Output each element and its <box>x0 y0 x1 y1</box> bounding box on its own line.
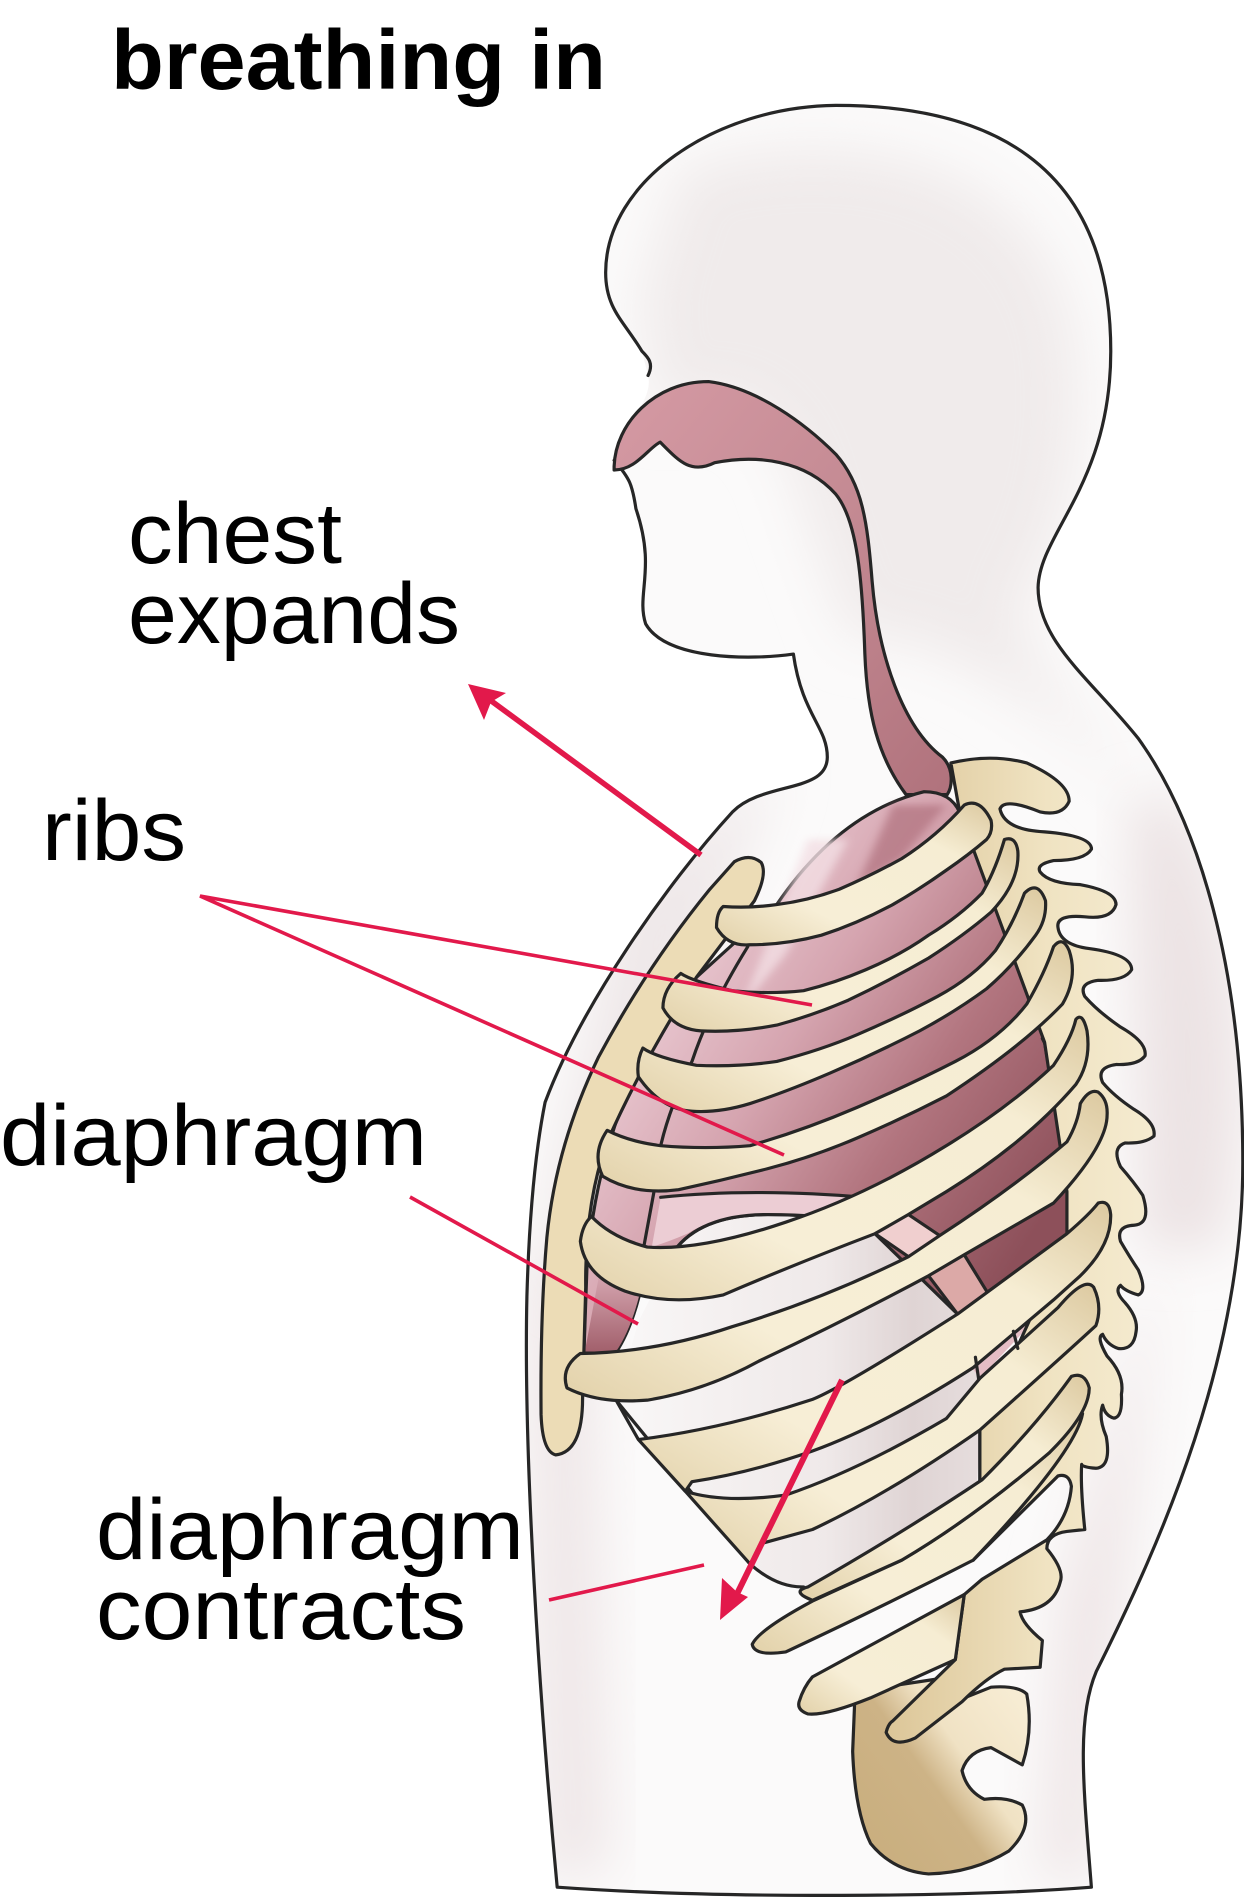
arrow: diaphragm contracts <box>720 1380 842 1620</box>
rib tick marks <box>975 1331 1018 1378</box>
airway: nasal cavity and trachea <box>614 382 951 795</box>
rib 12 <box>799 1595 964 1714</box>
lungs <box>584 792 1069 1352</box>
label: chest expands: chest <box>128 486 342 582</box>
rib 1 <box>717 803 992 945</box>
rib 10 <box>800 1375 1089 1600</box>
leader line: diaphragm contracts <box>549 1565 704 1600</box>
body silhouette <box>525 105 1243 1895</box>
diaphragm <box>616 1215 980 1587</box>
label: diaphragm contracts <box>96 1482 524 1658</box>
label: diaphragm contracts: diaphragm <box>96 1482 524 1578</box>
label: ribs: ribs <box>42 783 186 879</box>
rib 8 <box>685 1284 1099 1564</box>
rib 7 <box>616 1202 1111 1491</box>
rib 3 <box>638 888 1046 1112</box>
leader line: diaphragm <box>410 1197 638 1324</box>
rib 4 <box>598 942 1072 1191</box>
label: diaphragm: diaphragm <box>0 1088 427 1184</box>
arrow: chest expands <box>468 684 701 855</box>
label: chest expands <box>128 486 460 662</box>
rib 11 <box>752 1414 1083 1653</box>
lung shading <box>585 1255 644 1352</box>
rib 5 <box>580 1017 1088 1300</box>
title: breathing in <box>111 13 606 107</box>
pelvis <box>853 1678 1029 1874</box>
label: diaphragm contracts: contracts <box>96 1562 466 1658</box>
rib 2 <box>663 839 1018 1031</box>
ribs <box>565 803 1111 1714</box>
label: chest expands: expands <box>128 566 460 662</box>
spine and lower vertebrae <box>886 758 1154 1742</box>
sternum and costal cartilage <box>541 857 763 1455</box>
leader lines: ribs <box>200 896 812 1155</box>
chest organs <box>584 792 1069 1587</box>
lung and diaphragm contour lines <box>616 905 1065 1587</box>
rib 6 <box>565 1091 1107 1401</box>
